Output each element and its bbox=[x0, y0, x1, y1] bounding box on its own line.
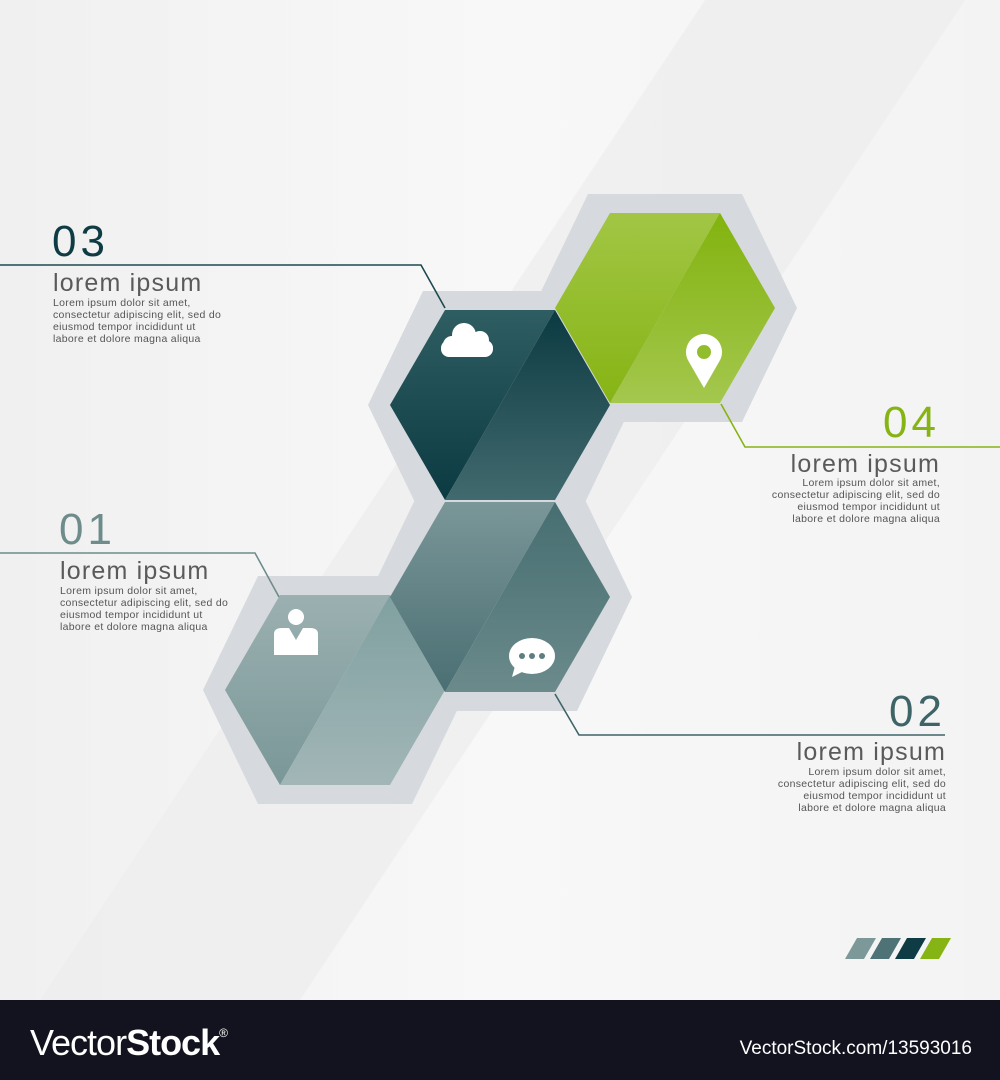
footer bar: VectorStock bbox=[30, 1022, 219, 1063]
text block 04: consectetur adipiscing elit, sed do bbox=[772, 489, 940, 501]
hexagon backdrop outline bbox=[203, 194, 797, 804]
text block 03: 03 bbox=[52, 217, 109, 266]
hexagon 03 bbox=[390, 310, 610, 500]
footer bar: VectorStock.com/13593016 bbox=[740, 1038, 972, 1059]
icon: cloud bbox=[441, 323, 493, 357]
text block 03: Lorem ipsum dolor sit amet, bbox=[53, 297, 191, 309]
icon: chat bubble bbox=[509, 638, 555, 677]
text block 02: 02 bbox=[889, 687, 946, 736]
hexagon 04 bbox=[555, 213, 775, 403]
text block 01 bbox=[59, 505, 228, 633]
text block 03: consectetur adipiscing elit, sed do bbox=[53, 309, 221, 321]
hexagon 01 bbox=[225, 595, 445, 785]
icon: person bbox=[274, 609, 318, 655]
text block 01: consectetur adipiscing elit, sed do bbox=[60, 597, 228, 609]
text block 04: 04 bbox=[883, 398, 940, 447]
text block 04 bbox=[772, 398, 940, 525]
text block 02: labore et dolore magna aliqua bbox=[798, 802, 946, 814]
text block 01: Lorem ipsum dolor sit amet, bbox=[60, 585, 198, 597]
text block 03: eiusmod tempor incididunt ut bbox=[53, 321, 196, 333]
text block 02: lorem ipsum bbox=[797, 738, 946, 766]
text block 01: labore et dolore magna aliqua bbox=[60, 621, 208, 633]
footer bar: ® bbox=[219, 1026, 228, 1040]
text block 01: eiusmod tempor incididunt ut bbox=[60, 609, 203, 621]
text block 02 bbox=[778, 687, 946, 814]
connector lines bbox=[0, 265, 1000, 735]
text block 04: labore et dolore magna aliqua bbox=[792, 513, 940, 525]
icon: location pin bbox=[686, 334, 722, 388]
text block 01: 01 bbox=[59, 505, 116, 554]
text block 04: lorem ipsum bbox=[791, 450, 940, 478]
text block 01: lorem ipsum bbox=[60, 557, 209, 585]
hexagon 02 bbox=[390, 502, 610, 692]
text block 02: consectetur adipiscing elit, sed do bbox=[778, 778, 946, 790]
footer bar bbox=[0, 1000, 1000, 1080]
text block 03 bbox=[52, 217, 221, 345]
text block 02: eiusmod tempor incididunt ut bbox=[803, 790, 946, 802]
text block 02: Lorem ipsum dolor sit amet, bbox=[808, 766, 946, 778]
text block 04: Lorem ipsum dolor sit amet, bbox=[802, 477, 940, 489]
text block 03: labore et dolore magna aliqua bbox=[53, 333, 201, 345]
text block 04: eiusmod tempor incididunt ut bbox=[797, 501, 940, 513]
decorative stripes legend bbox=[845, 938, 951, 959]
text block 03: lorem ipsum bbox=[53, 269, 202, 297]
